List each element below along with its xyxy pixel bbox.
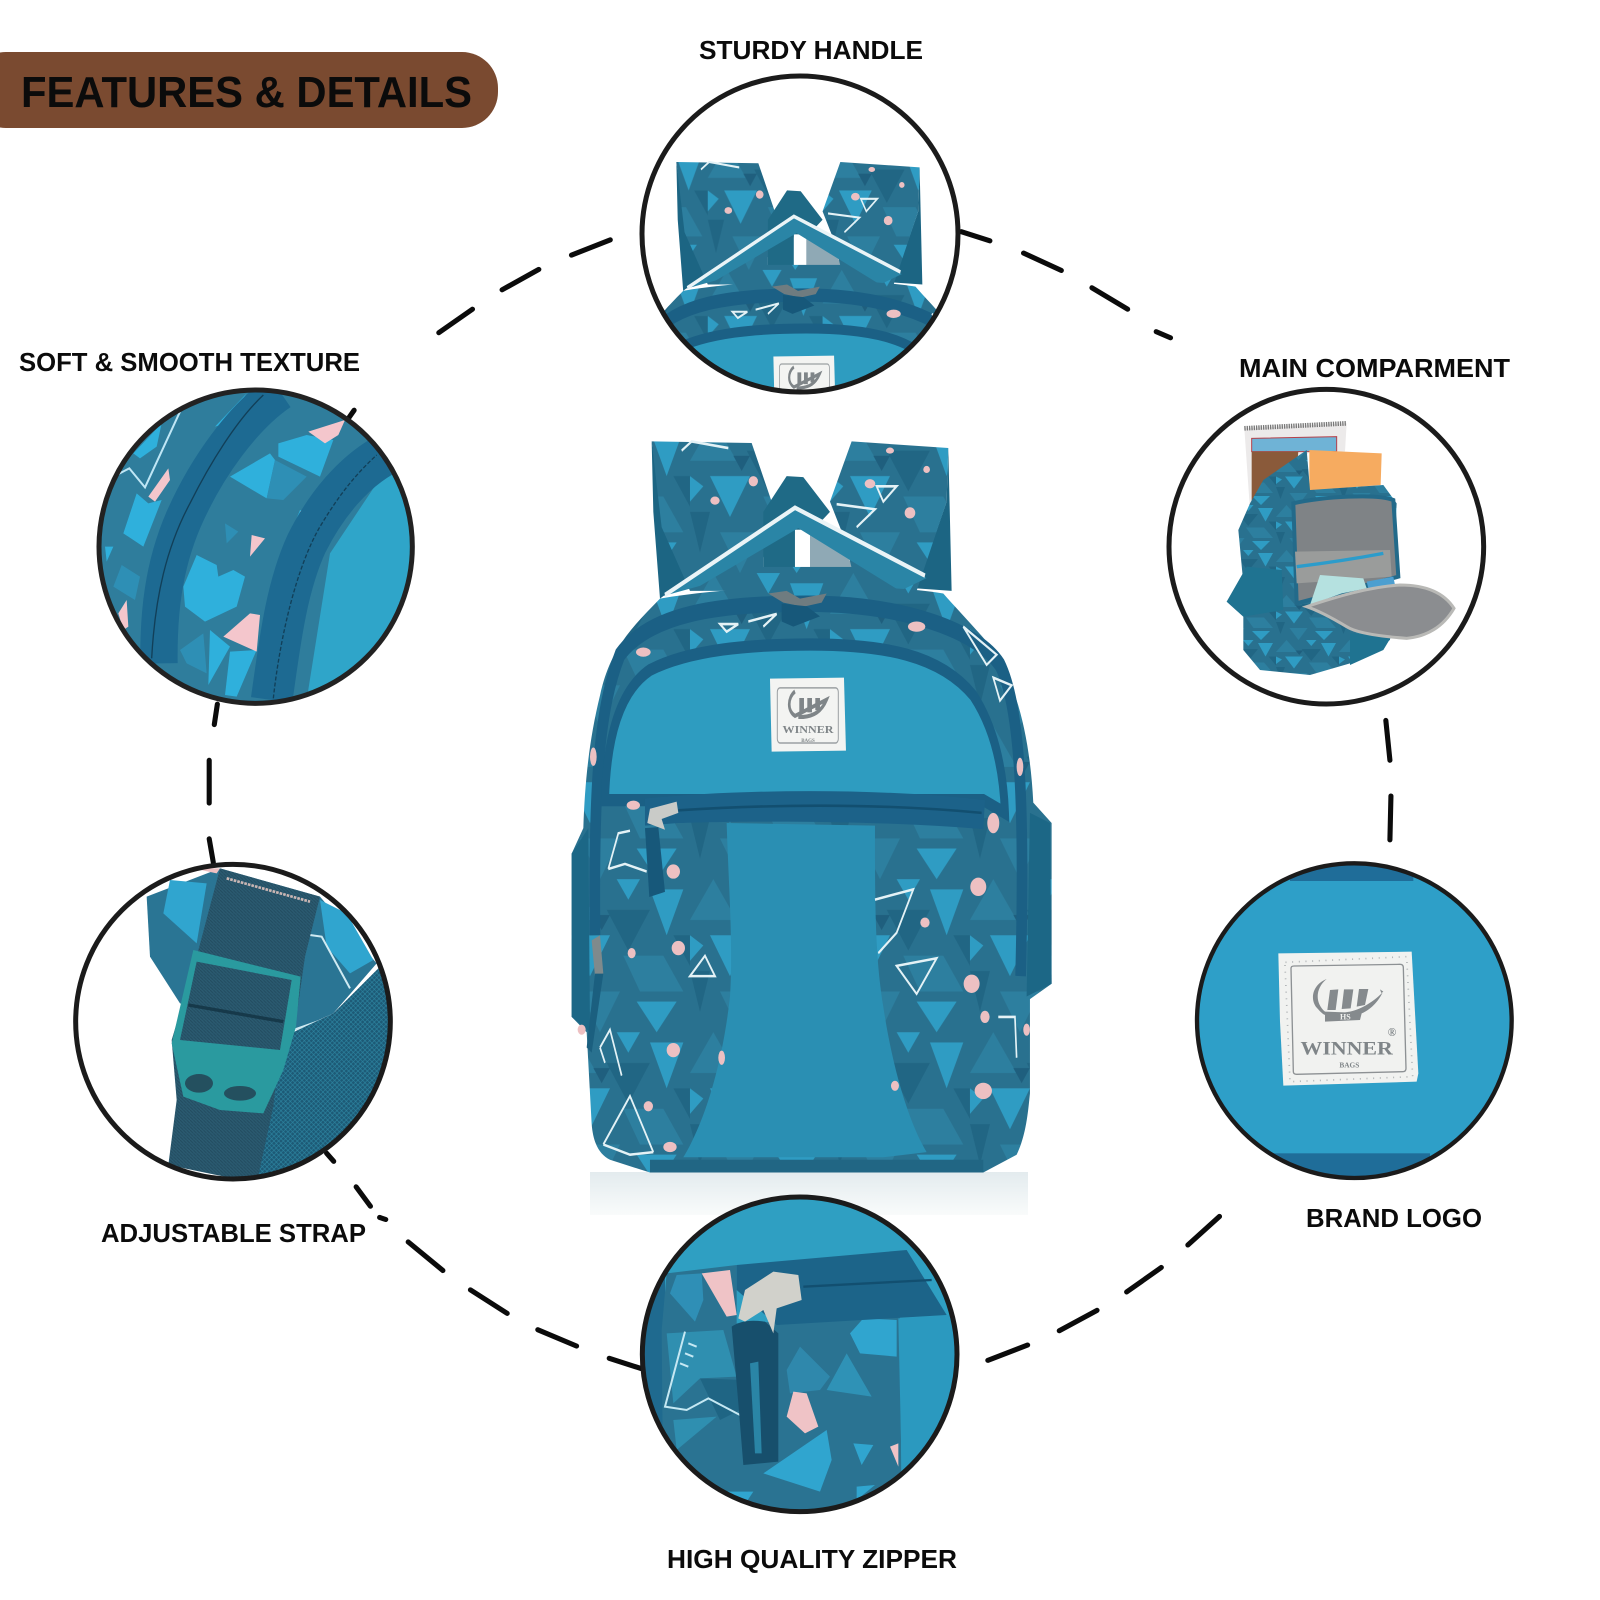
logo patch text: BAGS — [801, 739, 815, 744]
side mesh pockets — [572, 813, 1052, 1032]
woven label: BAGS — [1339, 1060, 1359, 1069]
carry handle — [663, 476, 927, 598]
detail circle: brand logo — [1197, 862, 1512, 1183]
woven label: WINNER — [1300, 1038, 1394, 1059]
webbing strap — [168, 868, 320, 1183]
label: soft and smooth texture: SOFT & SMOOTH TEXTURE — [19, 347, 360, 377]
zipper tape — [737, 1250, 947, 1325]
upper light panel — [605, 644, 1005, 813]
detail circle: main compartment — [1169, 389, 1484, 704]
orange book — [1309, 450, 1382, 491]
bottom binding strip — [650, 1160, 983, 1173]
woven label: ® — [1388, 1027, 1397, 1039]
strap stitching — [227, 878, 310, 902]
mesh back panel — [258, 968, 388, 1174]
logo patch text — [782, 724, 835, 744]
elephant logo mark — [1313, 979, 1383, 1022]
right plain panel — [898, 1318, 901, 1434]
shoulder straps — [652, 441, 952, 599]
top and side zipper pulls — [587, 591, 827, 1053]
front pocket zipper — [645, 791, 985, 897]
label: brand logo: BRAND LOGO — [1306, 1203, 1482, 1233]
detail circle: sturdy handle — [640, 74, 960, 394]
main zipper band — [595, 604, 1022, 976]
zipper tapes — [152, 392, 382, 700]
teal buckle — [172, 950, 301, 1113]
printed pocket fabric — [662, 1265, 902, 1523]
zipper edges — [1270, 862, 1430, 1183]
heading pill — [0, 52, 498, 128]
lower centre panel — [683, 823, 927, 1157]
label: adjustable strap: ADJUSTABLE STRAP — [101, 1218, 366, 1248]
dashed connector ring — [209, 232, 1391, 1368]
printed shoulder fabric — [147, 868, 377, 1030]
label: main compartment: MAIN COMPARMENT — [1239, 353, 1510, 383]
heading pill: FEATURES & DETAILS — [21, 68, 472, 117]
pink print spots — [578, 448, 1030, 1152]
label: high quality zipper: HIGH QUALITY ZIPPER — [667, 1544, 957, 1574]
floor reflection under backpack — [590, 1172, 1028, 1215]
detail circle: soft and smooth texture — [99, 390, 423, 713]
side binding — [644, 1278, 665, 1426]
bag body — [572, 586, 1052, 1173]
sewn logo patch on bag — [770, 678, 846, 752]
woven zipper pull tab — [732, 1321, 778, 1465]
label: sturdy handle: STURDY HANDLE — [699, 35, 923, 65]
open backpack — [1227, 450, 1454, 675]
metal zipper slider — [738, 1272, 802, 1333]
white line print — [600, 441, 1017, 1155]
logo patch text: WINNER — [782, 724, 835, 736]
woven label: HS — [1340, 1012, 1351, 1021]
main backpack illustration — [572, 441, 1052, 1173]
printed fabric shapes — [105, 393, 345, 697]
detail circle: high quality zipper — [640, 1197, 963, 1523]
woven label — [1278, 952, 1418, 1086]
spiral notebook — [1244, 423, 1347, 510]
light front panel — [308, 475, 410, 692]
detail circle: adjustable strap — [76, 864, 397, 1187]
